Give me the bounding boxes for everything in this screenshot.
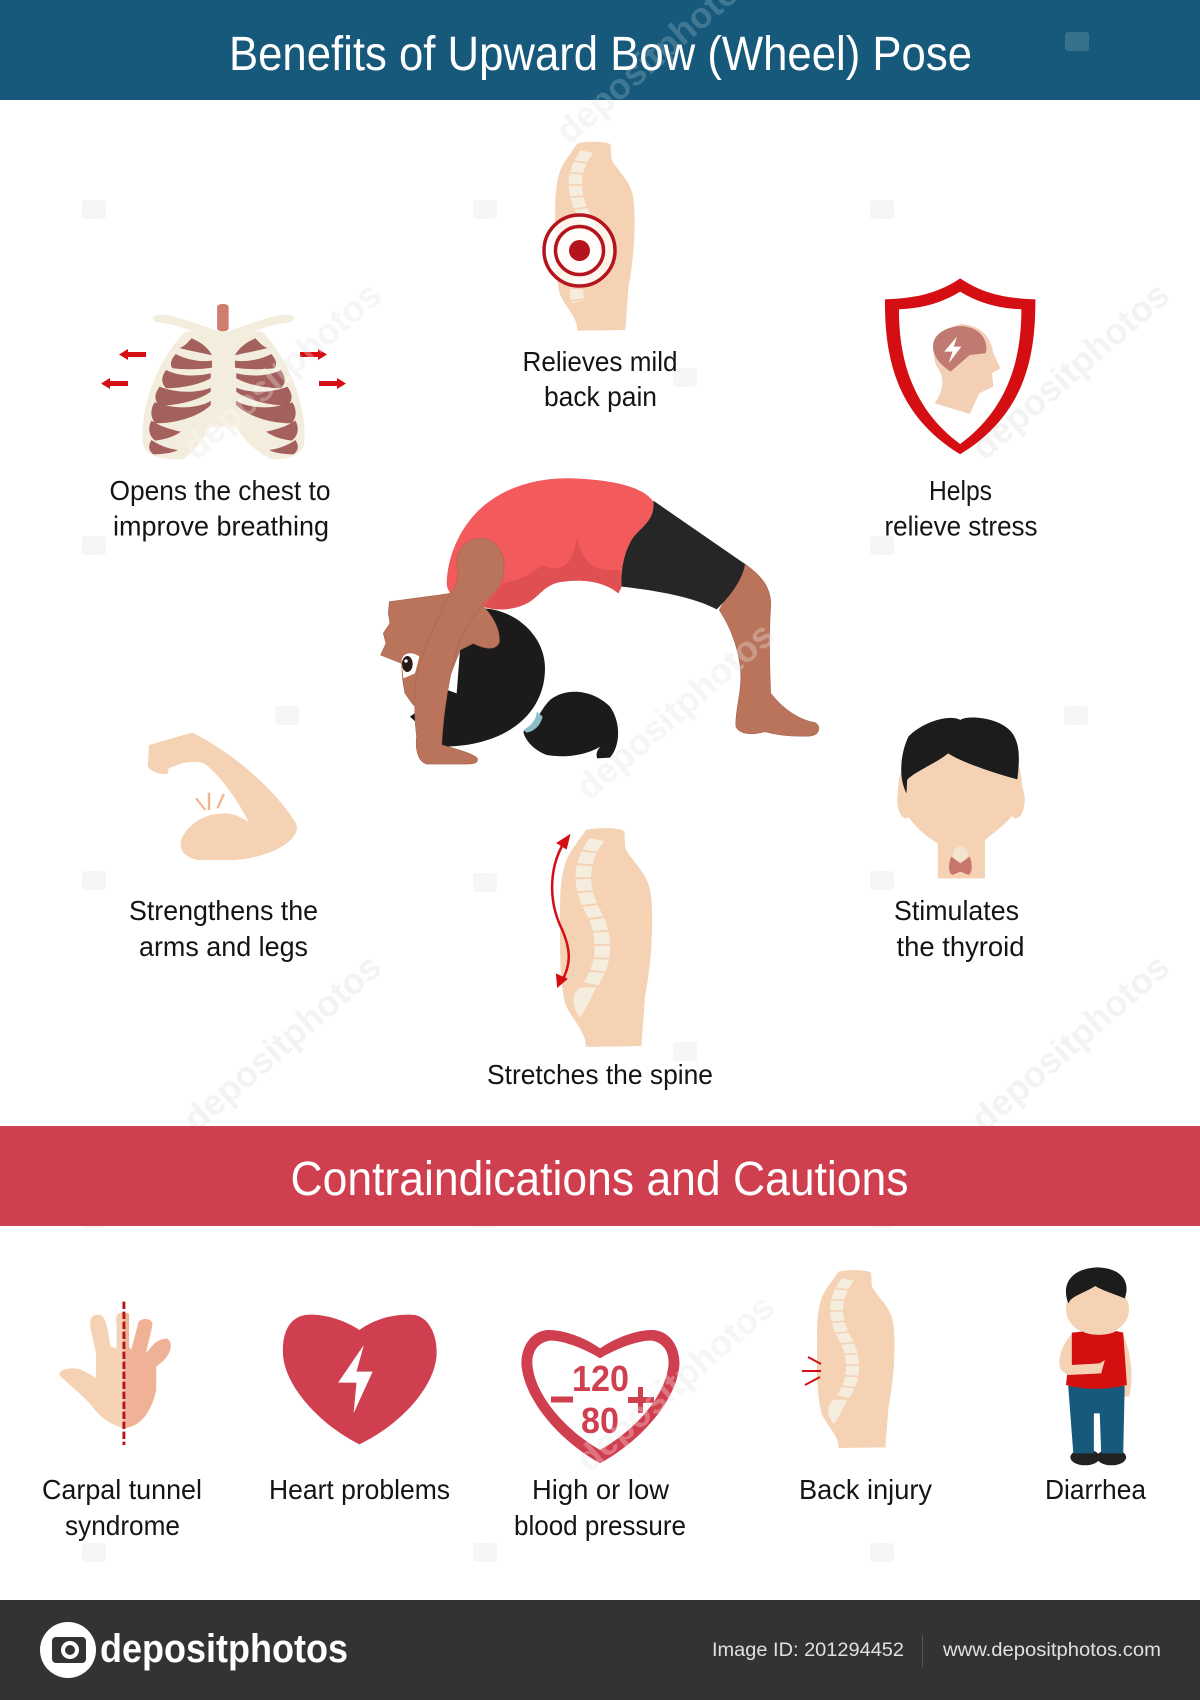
label: heart problems: Heart problems (269, 1474, 450, 1505)
label: relieve stress: Helps (929, 475, 992, 506)
icon: stretched spine (552, 828, 652, 1047)
footer logo: depositphotos (100, 1627, 348, 1671)
shorts (621, 501, 745, 609)
shirt shadow (483, 537, 622, 609)
label: opens the chest: improve breathing (113, 510, 329, 542)
label: relieves back pain: Relieves mild (522, 346, 678, 377)
label: stimulates thyroid: the thyroid (896, 931, 1024, 962)
eye (402, 653, 419, 678)
watermark overlay on artwork (175, 274, 782, 1479)
label: blood pressure: blood pressure (514, 1510, 686, 1541)
title banner: Benefits of Upward Bow (Wheel) Pose (229, 28, 972, 81)
label: opens the chest (110, 475, 330, 542)
watermark pattern: depositphotos (175, 274, 389, 467)
footer image id: Image ID: 201294452 (712, 1640, 904, 1661)
ponytail (523, 692, 618, 758)
label: relieves back pain: back pain (544, 381, 657, 412)
watermark pattern: depositphotos (963, 274, 1177, 467)
icon: blood pressure heart: 120 (572, 1358, 629, 1399)
head (381, 593, 499, 707)
label: stimulates thyroid (894, 895, 1024, 962)
hair bun (410, 608, 545, 747)
label: blood pressure (514, 1474, 686, 1541)
watermark overlay on artwork: depositphotos (568, 1286, 782, 1479)
icon: person holding stomach (1059, 1267, 1131, 1465)
watermark pattern: depositphotos (175, 946, 389, 1139)
hair tie (523, 712, 543, 733)
label: opens the chest: Opens the chest to (110, 475, 330, 506)
section banner: contraindications (0, 1126, 1200, 1226)
leg (719, 564, 819, 736)
watermark overlay on artwork: depositphotos (175, 274, 389, 467)
watermark overlay on artwork: depositphotos (568, 614, 782, 807)
footer bar (0, 1600, 1200, 1700)
icon: blood pressure heart (521, 1330, 679, 1463)
label: stretches spine: Stretches the spine (487, 1059, 713, 1090)
label: relieves back pain (522, 346, 678, 412)
icon: hand carpal tunnel (59, 1302, 171, 1445)
icon: head with thyroid (897, 718, 1025, 878)
label: strengthens arms and legs: arms and legs (139, 931, 308, 962)
watermark pattern: depositphotos (568, 614, 782, 807)
watermark pattern: depositphotos (963, 946, 1177, 1139)
section banner: contraindications: Contraindications and Cautions (290, 1153, 908, 1206)
watermark pattern: depositphotos (568, 1286, 782, 1479)
icon: back pain target (544, 142, 635, 331)
icon: heart with bolt (283, 1315, 437, 1444)
label: diarrhea: Diarrhea (1045, 1474, 1146, 1505)
title banner (0, 0, 1200, 151)
central figure: wheel pose (381, 478, 819, 764)
label: carpal tunnel (42, 1474, 202, 1541)
label: relieve stress (884, 475, 1038, 542)
icon: ribcage with arrows (101, 304, 346, 459)
label: blood pressure: High or low (532, 1474, 670, 1505)
label: carpal tunnel: Carpal tunnel (42, 1474, 202, 1505)
icon: back injury (802, 1270, 894, 1448)
icon: blood pressure heart: 80 (581, 1400, 619, 1441)
label: strengthens arms and legs (129, 895, 318, 962)
label: relieve stress: relieve stress (884, 510, 1038, 542)
label: strengthens arms and legs: Strengthens the (129, 895, 318, 926)
footer url: www.depositphotos.com (942, 1640, 1161, 1661)
footer logo (40, 1622, 348, 1678)
label: back injury: Back injury (799, 1474, 932, 1505)
arm (415, 538, 504, 764)
label: carpal tunnel: syndrome (65, 1510, 180, 1541)
shirt (447, 478, 654, 609)
icon: shield with head (885, 278, 1035, 454)
icon: flexed arm (148, 733, 297, 860)
label: stimulates thyroid: Stimulates (894, 895, 1019, 926)
